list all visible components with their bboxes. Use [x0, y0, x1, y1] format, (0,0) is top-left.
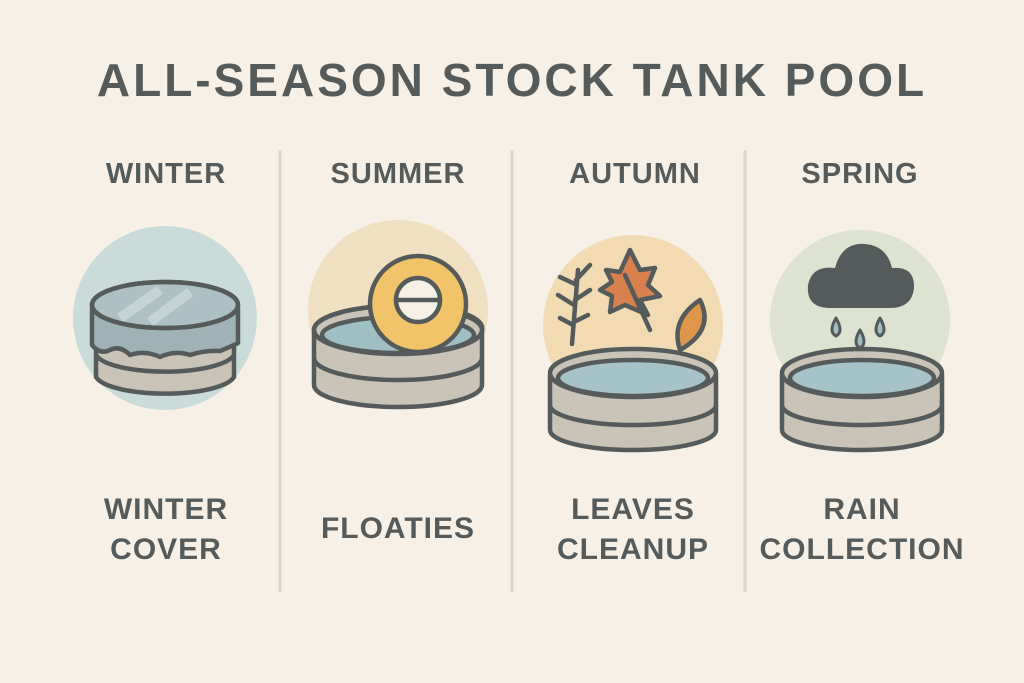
icon: spring tank with rain — [770, 230, 950, 450]
label: rain collection: RAIN — [823, 493, 901, 526]
label: leaves cleanup: CLEANUP — [557, 533, 709, 566]
heading: spring: SPRING — [801, 158, 919, 190]
icon: autumn tank with leaves — [543, 235, 723, 450]
icon: winter covered tank — [73, 226, 257, 410]
title: ALL-SEASON STOCK TANK POOL — [97, 54, 927, 106]
label: leaves cleanup: LEAVES — [571, 493, 695, 526]
heading: summer: SUMMER — [331, 158, 465, 190]
heading: winter: WINTER — [106, 158, 226, 190]
label: winter cover: COVER — [110, 533, 222, 566]
label: winter cover: WINTER — [104, 493, 228, 526]
label: rain collection: COLLECTION — [760, 533, 964, 566]
icon: summer tank with float — [308, 220, 488, 407]
label: floaties: FLOATIES — [321, 512, 475, 545]
heading: autumn: AUTUMN — [569, 158, 701, 190]
